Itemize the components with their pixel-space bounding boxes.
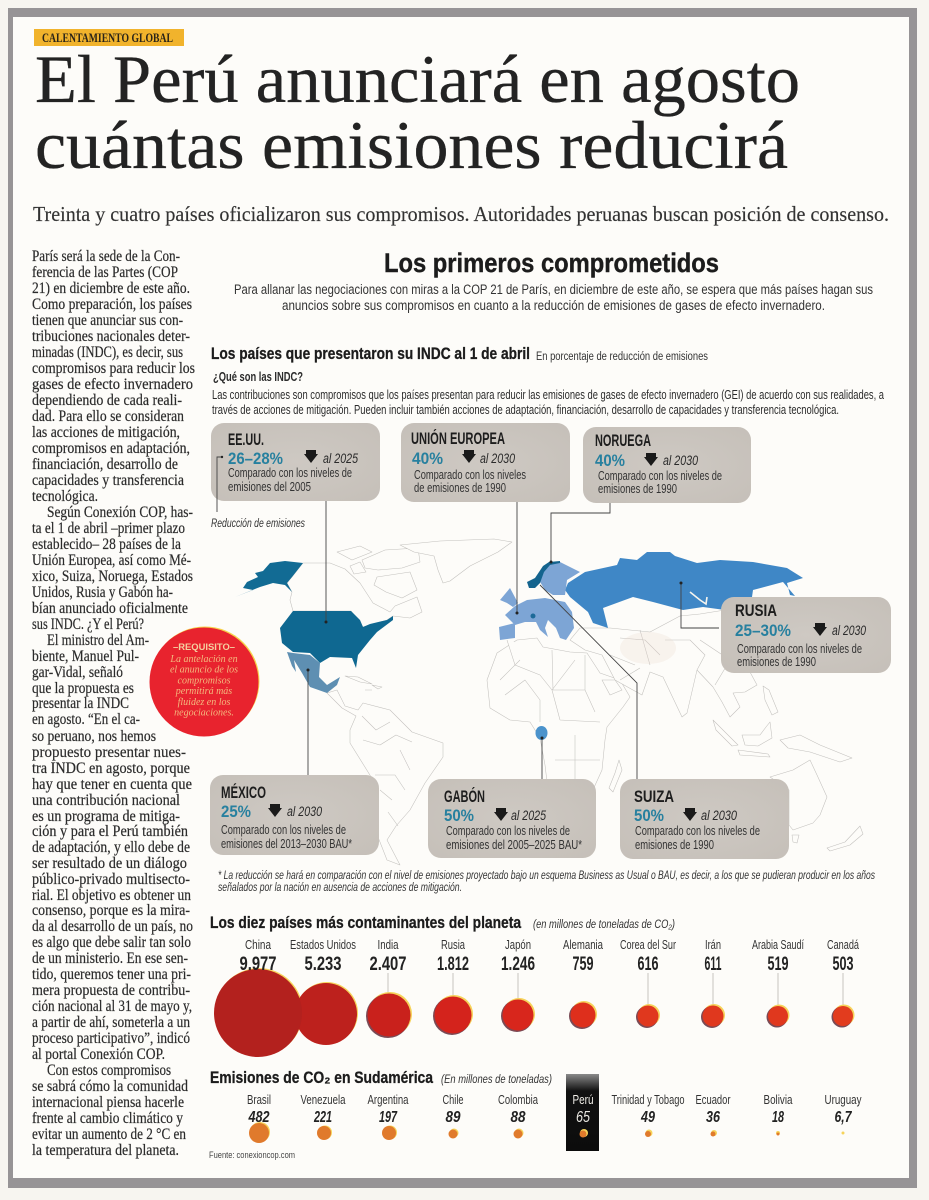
callout: México: al 2030 (287, 804, 322, 819)
country: Alaska (EE.UU.) (235, 561, 303, 597)
callout: México: emisiones del 2013–2030 BAU* (221, 837, 352, 851)
country: México (287, 652, 340, 693)
heading: top ten polluters: (en millones de toneladas de CO₂) (533, 919, 675, 931)
article text column: ción y para el Perú también (32, 823, 188, 840)
article text column: rial. El objetivo es obtener un (32, 887, 191, 904)
countries: Unión Europea (499, 562, 580, 640)
values: 221 (313, 1109, 332, 1126)
country: Gabón (536, 726, 548, 740)
section tag: CALENTAMIENTO GLOBAL (42, 30, 173, 45)
title: El Perú anunciará en agosto (35, 41, 800, 117)
callout: Noruega: NORUEGA (595, 432, 651, 450)
chart: top ten polluters (214, 938, 859, 1057)
article text column: financiación, desarrollo de (32, 456, 178, 473)
highlight bar: Perú (566, 1074, 599, 1151)
callout: Gabón: GABÓN (444, 787, 485, 806)
section tag (34, 29, 184, 46)
article text column: ser resultado de un diálogo (32, 855, 187, 872)
callout: EE.UU.: EE.UU. (228, 431, 264, 449)
article text column: establecido– 28 países de la (32, 536, 181, 553)
leader: reducción de emisiones (217, 456, 223, 512)
infographic intro (234, 282, 873, 313)
callout: Gabón (428, 779, 596, 858)
callout: Rusia: al 2030 (832, 623, 866, 638)
callout: Gabón: Comparado con los niveles de (446, 824, 570, 838)
callout: requisito: el anuncio de los (170, 664, 238, 676)
article text column: al portal Conexión COP. (32, 1046, 165, 1063)
values: 65 (576, 1109, 590, 1126)
heading: South America: (En millones de toneladas) (441, 1074, 552, 1086)
callout: México: 25% (221, 802, 251, 821)
callout: Rusia: 25–30% (735, 621, 791, 640)
title (35, 41, 800, 183)
country names: Chile (442, 1093, 464, 1107)
values: 36 (706, 1109, 720, 1126)
callout: Gabón: emisiones del 2005–2025 BAU* (446, 838, 582, 852)
callout: Suiza: SUIZA (634, 788, 674, 806)
article text column: bían anunciado oficialmente (32, 600, 188, 617)
values: 6,7 (834, 1109, 852, 1126)
article text column: dad. Para ello se consideran (32, 408, 184, 425)
callout: México: MÉXICO (221, 783, 266, 802)
callout: Suiza: Comparado con los niveles de (635, 824, 760, 838)
heading: South America: Emisiones de CO₂ en Sudamérica (210, 1068, 433, 1087)
article text column: es un programa de mitiga- (32, 808, 180, 825)
article text column: las acciones de mitigación, (32, 424, 180, 441)
country: Rusia (565, 552, 803, 628)
article text column: que la propuesta es (32, 680, 134, 697)
article text column: tribuciones nacionales deter- (32, 328, 190, 345)
callout: Unión Europea: UNIÓN EUROPEA (411, 429, 505, 448)
article text column: tecnológica. (32, 488, 98, 505)
heading: top ten polluters: Los diez países más contaminantes del planeta (210, 913, 521, 932)
country names: Canadá (827, 938, 859, 952)
values: 88 (510, 1109, 526, 1126)
footnote: señalados por la nación en ausencia de acciones de mitigación. (218, 882, 462, 894)
country names: Japón (505, 938, 531, 952)
country: Suiza (530, 614, 536, 618)
article text column: Unidos, Rusia y Gabón ha- (32, 584, 173, 601)
values: 18 (772, 1109, 784, 1126)
country names: Irán (705, 938, 721, 952)
article text column: frente al cambio climático y (32, 1110, 183, 1127)
article text column: xico, Suiza, Noruega, Estados (32, 568, 193, 585)
values: 616 (638, 954, 658, 975)
article text column: público-privado multisecto- (32, 871, 190, 888)
country names: Arabia Saudí (752, 938, 804, 952)
article text column: presentar la INDC (32, 695, 129, 712)
callout: EE.UU. (211, 423, 380, 501)
article text column: se sabrá cómo la comunidad (32, 1078, 188, 1095)
country: EE.UU. (280, 611, 393, 668)
article text column: Según Conexión COP, has- (47, 504, 193, 521)
circles (249, 1123, 780, 1143)
callout: Suiza (620, 779, 789, 859)
values: 5.233 (304, 954, 342, 975)
callout: requisito: permitirá más (175, 686, 232, 697)
callout: Suiza: emisiones de 1990 (635, 838, 714, 852)
callout: requisito (150, 626, 260, 736)
article text column: mera propuesta de contribu- (32, 982, 190, 999)
article text column: gar-Vidal, señaló (32, 664, 123, 681)
infographic heading: Los primeros comprometidos (384, 248, 719, 278)
article text column: ción nacional al 31 de mayo y, (32, 998, 192, 1015)
country names: Rusia (441, 938, 465, 952)
article text column: de un ministerio. En ese sen- (32, 950, 188, 967)
country names: Colombia (498, 1093, 538, 1107)
callout: Gabón: al 2025 (511, 808, 546, 823)
section heading: INDC: Los países que presentaron su INDC al 1 de abril (211, 344, 530, 363)
callout: Suiza: al 2030 (701, 808, 737, 823)
world map (235, 539, 863, 865)
explainer: qué son las INDC: ¿Qué son las INDC? (213, 370, 303, 384)
article text column: evitar un aumento de 2 °C en (32, 1126, 186, 1143)
circles shadow (366, 994, 852, 1038)
article text column: Con estos compromisos (47, 1062, 171, 1079)
article text column: tienen que anunciar sus con- (32, 312, 183, 329)
callout: Unión Europea: 40% (412, 449, 443, 468)
callout: EE.UU.: emisiones del 2005 (228, 480, 311, 494)
callout: Rusia: emisiones de 1990 (737, 655, 816, 669)
values: 49 (640, 1109, 655, 1126)
callout: Rusia (721, 597, 891, 673)
values: 89 (446, 1109, 461, 1126)
leader line dots (306, 560, 682, 740)
country names: Trinidad y Tobago (612, 1093, 685, 1107)
callout: México: Comparado con los niveles de (221, 823, 346, 837)
article text column: proceso participativo”, indicó (32, 1030, 190, 1047)
callout: EE.UU.: al 2025 (323, 451, 358, 466)
article text column: sus INDC. ¿Y el Perú? (32, 616, 144, 633)
country names: China (245, 938, 271, 952)
values: 197 (379, 1109, 398, 1126)
lake in Rusia (690, 592, 707, 604)
country names: India (378, 938, 399, 952)
article text column: a partir de ahí, someterla a un (32, 1014, 190, 1031)
country names: Argentina (368, 1093, 409, 1107)
values: 503 (832, 954, 854, 975)
callout: Unión Europea: al 2030 (480, 451, 515, 466)
article text column: la temperatura del planeta. (32, 1142, 179, 1159)
country names: Venezuela (300, 1093, 346, 1107)
map: grey country outlines (287, 539, 863, 865)
callout: requisito: –REQUISITO– (173, 642, 235, 653)
article text column: de adaptación, y ello debe de (32, 839, 190, 856)
callout: Gabón: 50% (444, 806, 474, 825)
values: 9.977 (240, 954, 276, 975)
values: 1.246 (501, 954, 535, 975)
article text column: El ministro del Am- (47, 632, 149, 649)
article text column: hay que tener en cuenta que (32, 776, 192, 793)
article text column: en agosto. “En el ca- (32, 711, 140, 728)
circles (214, 969, 853, 1057)
article text column (32, 248, 195, 1159)
article text column: Unión Europea, así como Mé- (32, 552, 191, 569)
article text column: una contribución nacional (32, 792, 180, 809)
values: 1.812 (437, 954, 469, 975)
label: reducción de emisiones: Reducción de emisiones (211, 518, 305, 530)
stems (388, 973, 843, 1006)
map: soft tint over central Asia (620, 632, 676, 664)
article text column: París será la sede de la Con- (32, 248, 180, 265)
article text column: tido, queremos tener una pri- (32, 966, 191, 983)
callout: Rusia: Comparado con los niveles de (737, 642, 862, 656)
infographic intro: anuncios sobre sus compromisos en cuanto a la reducción de emisiones de gases de efecto invernadero. (282, 298, 825, 313)
values: 519 (768, 954, 788, 975)
article text column: dependiendo de cada reali- (32, 392, 182, 409)
values: 2.407 (370, 954, 406, 975)
callout: EE.UU.: Comparado con los niveles de (228, 466, 352, 480)
leader lines (308, 501, 719, 779)
values (248, 1109, 852, 1126)
chart: South America (247, 1093, 862, 1143)
article text column: gases de efecto invernadero (32, 376, 193, 393)
country names: Corea del Sur (620, 938, 676, 952)
callout: Rusia: RUSIA (735, 602, 777, 620)
source: Fuente: conexioncop.com (209, 1150, 295, 1160)
values: 759 (572, 954, 594, 975)
article text column: minadas (INDC), es decir, sus (32, 344, 183, 361)
country names: Uruguay (824, 1093, 862, 1107)
subtitle: Treinta y cuatro países oficializaron sus compromisos. Autoridades peruanas buscan posición de consenso. (33, 202, 889, 226)
callout: Suiza: 50% (634, 806, 664, 825)
callout: requisito: La antelación en (169, 654, 238, 665)
callout: Noruega: 40% (595, 451, 625, 470)
country names (245, 938, 859, 952)
article text column: internacional piensa hacerle (32, 1094, 184, 1111)
title: cuántas emisiones reducirá (35, 107, 788, 183)
article text column: 21) en diciembre de este año. (32, 280, 190, 297)
article text column: compromisos en adaptación, (32, 440, 190, 457)
values (240, 954, 854, 975)
callout: requisito: fluidez en los (178, 697, 230, 708)
article text column: biente, Manuel Pul- (32, 648, 139, 665)
article text column: compromisos para reducir los (32, 360, 195, 377)
circles highlight (250, 1122, 844, 1142)
article text column: ta el 1 de abril –primer plazo (32, 520, 185, 537)
country names: Alemania (563, 938, 603, 952)
callout: EE.UU.: 26–28% (228, 449, 283, 468)
circles highlight (215, 968, 854, 1056)
explainer: qué son las INDC (212, 370, 884, 417)
article text column: es algo que debe salir tan solo (32, 934, 191, 951)
article text column: da al desarrollo de un país, no (32, 918, 193, 935)
country: Noruega (527, 561, 560, 588)
country names: Ecuador (696, 1093, 730, 1107)
callout: Noruega: emisiones de 1990 (598, 482, 677, 496)
callout: Noruega (583, 427, 751, 503)
article text column: ferencia de las Partes (COP (32, 264, 178, 281)
section heading: INDC: En porcentaje de reducción de emisiones (536, 351, 708, 363)
country names (247, 1093, 862, 1107)
article text column: capacidades y transferencia (32, 472, 184, 489)
country names: Bolivia (764, 1093, 793, 1107)
article text column: consenso, porque es la mira- (32, 902, 190, 919)
article text column: tra INDC en agosto, porque (32, 760, 190, 777)
article text column: propuesto presentar nues- (32, 744, 186, 761)
callout: Noruega: Comparado con los niveles de (598, 469, 722, 483)
values: 482 (248, 1109, 270, 1126)
callout: Unión Europea (401, 423, 570, 502)
country names: Brasil (247, 1093, 271, 1107)
callout: Unión Europea: Comparado con los niveles (414, 468, 526, 482)
values: 611 (704, 954, 722, 975)
footnote (218, 870, 875, 894)
callout: Noruega: al 2030 (663, 453, 698, 468)
article text column: Como preparación, los países (32, 296, 192, 313)
article text column: so peruano, nos hemos (32, 728, 156, 745)
callout: México (210, 775, 379, 855)
country names: Perú (572, 1093, 594, 1107)
callout: requisito: negociaciones. (174, 708, 234, 718)
callout: requisito: compromisos (178, 676, 231, 686)
callout: Unión Europea: de emisiones de 1990 (414, 481, 506, 495)
country names: Estados Unidos (290, 938, 356, 952)
